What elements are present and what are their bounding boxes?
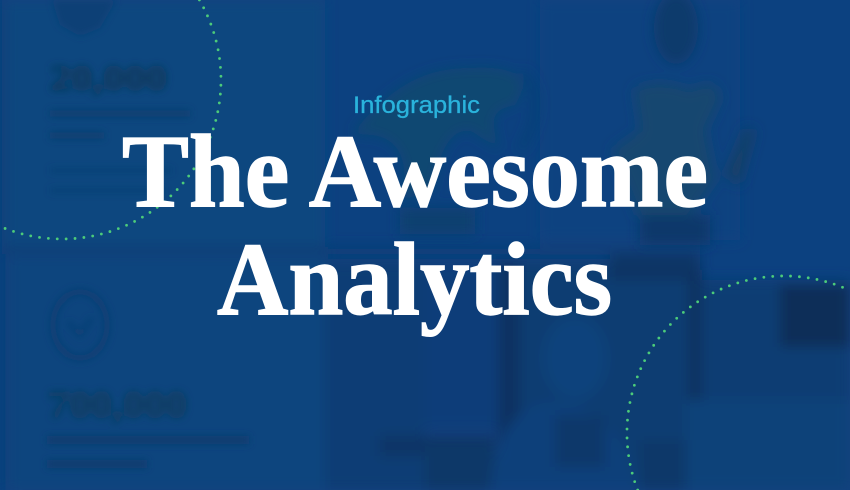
title: The Awesome [122,114,708,229]
dotted circle: bottom right [627,276,850,490]
blurred plant [355,68,521,200]
subtitle: Infographic [353,92,480,119]
blurred stat block: top [50,0,190,193]
dotted circle: top left [0,0,221,239]
blurred figure [654,0,698,64]
blurred stat block: bottom [47,292,249,468]
title [122,114,708,337]
title: Analytics [217,222,612,337]
blurred stat block: bottom: 700,000 [48,384,187,426]
blurred stat block: top: 20,000 [50,58,167,98]
